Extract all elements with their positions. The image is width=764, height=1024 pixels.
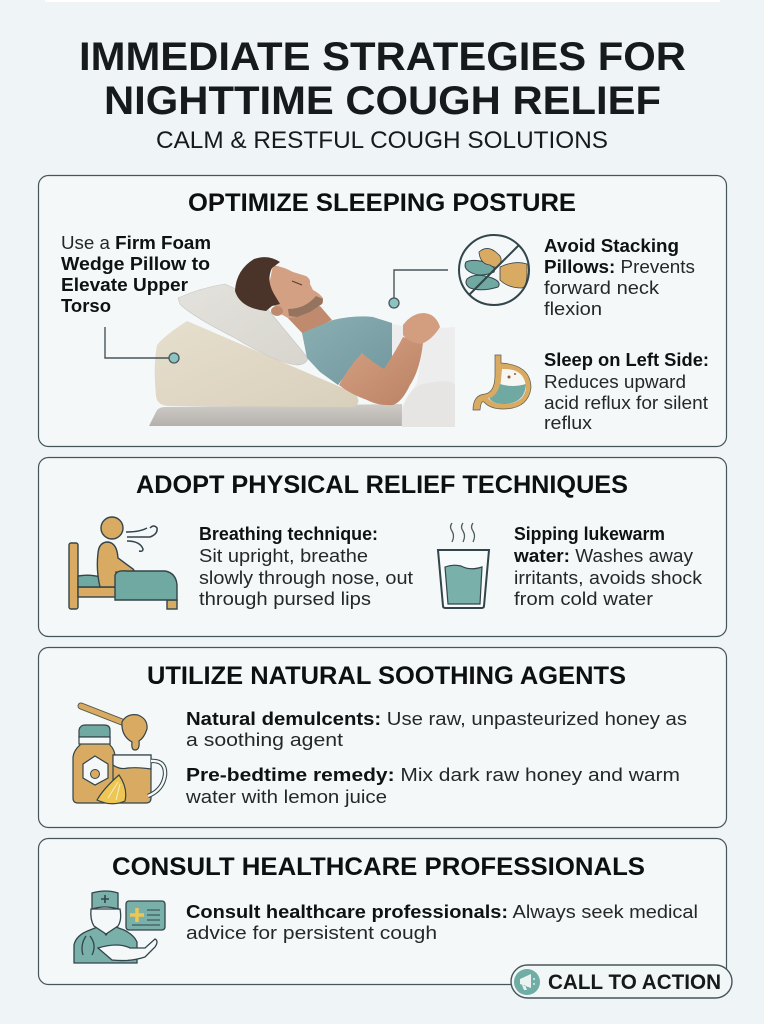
text: sipping lukewarm water: water: Washes away — [513, 546, 693, 566]
text: breathing technique: Breathing technique: — [199, 524, 378, 544]
text: consult healthcare professionals: Consult healthcare professionals: Always seek medical — [186, 902, 698, 922]
text: sipping lukewarm water — [513, 524, 703, 609]
icon: honey jar, dipper, tea with lemon — [73, 706, 165, 804]
leader line: wedge callout — [105, 327, 179, 363]
text: breathing technique — [199, 524, 413, 609]
panel: healthcare professionals — [38, 838, 726, 984]
text: wedge pillow: Elevate Upper — [61, 275, 188, 295]
text: avoid stacking pillows: Pillows: Prevents — [544, 257, 695, 277]
heading: optimize sleeping posture: OPTIMIZE SLEEPING POSTURE — [188, 189, 576, 217]
title: IMMEDIATE STRATEGIES FOR — [79, 35, 686, 79]
call to action badge — [511, 965, 732, 998]
text: wedge pillow: Use a Firm Foam — [61, 233, 211, 253]
title — [79, 35, 686, 123]
panel: natural soothing agents — [38, 648, 726, 828]
text: avoid stacking pillows — [544, 236, 695, 319]
icon: no stacked pillows — [459, 235, 529, 305]
icon: megaphone — [514, 969, 540, 995]
text: sipping lukewarm water: irritants, avoids shock — [514, 568, 703, 588]
heading: physical relief techniques: ADOPT PHYSICAL RELIEF TECHNIQUES — [136, 471, 628, 499]
text: pre-bedtime remedy: Pre-bedtime remedy: Mix dark raw honey and warm — [186, 765, 680, 785]
text: sleep on left side: Sleep on Left Side: — [544, 350, 709, 370]
text: consult healthcare professionals: advice for persistent cough — [186, 923, 437, 943]
text: sipping lukewarm water: from cold water — [514, 589, 653, 609]
text: sleep on left side: Reduces upward — [544, 372, 686, 392]
subtitle: CALM & RESTFUL COUGH SOLUTIONS — [156, 127, 608, 154]
text: natural demulcents: a soothing agent — [186, 730, 343, 750]
text: wedge pillow: Torso — [61, 296, 111, 316]
text: breathing technique: Sit upright, breathe — [199, 546, 368, 566]
text: pre-bedtime remedy — [185, 765, 680, 807]
text: consult healthcare professionals — [186, 902, 698, 943]
text: pre-bedtime remedy: water with lemon juice — [185, 787, 387, 807]
text: sleep on left side: acid reflux for silent — [544, 393, 708, 413]
panel: physical relief techniques — [38, 458, 726, 636]
illustration: man resting on wedge pillow — [149, 257, 455, 427]
text: sleep on left side — [544, 350, 709, 433]
text: wedge pillow: Wedge Pillow to — [61, 254, 210, 274]
icon: glass of lukewarm water — [438, 523, 489, 608]
title: NIGHTTIME COUGH RELIEF — [104, 79, 661, 123]
leader line: pillow callout — [389, 270, 448, 308]
text: breathing technique: through pursed lips — [199, 589, 371, 609]
text: avoid stacking pillows: flexion — [544, 299, 602, 319]
heading: natural soothing agents: UTILIZE NATURAL SOOTHING AGENTS — [147, 662, 626, 690]
text: breathing technique: slowly through nose, out — [199, 568, 413, 588]
heading: healthcare professionals: CONSULT HEALTHCARE PROFESSIONALS — [112, 853, 645, 881]
text: avoid stacking pillows: Avoid Stacking — [544, 236, 679, 256]
text: wedge pillow — [61, 233, 211, 316]
panel: optimize sleeping posture — [38, 176, 726, 446]
label: call to action: CALL TO ACTION — [548, 971, 721, 994]
icon: doctor with medical card — [74, 891, 165, 963]
text: natural demulcents — [186, 709, 687, 750]
text: sleep on left side: reflux — [544, 413, 592, 433]
text: sipping lukewarm water: Sipping lukewarm — [514, 524, 665, 544]
text: avoid stacking pillows: forward neck — [544, 278, 660, 298]
icon: person breathing upright in bed — [69, 517, 177, 609]
text: natural demulcents: Natural demulcents: Use raw, unpasteurized honey as — [186, 709, 687, 729]
icon: stomach — [473, 355, 531, 410]
